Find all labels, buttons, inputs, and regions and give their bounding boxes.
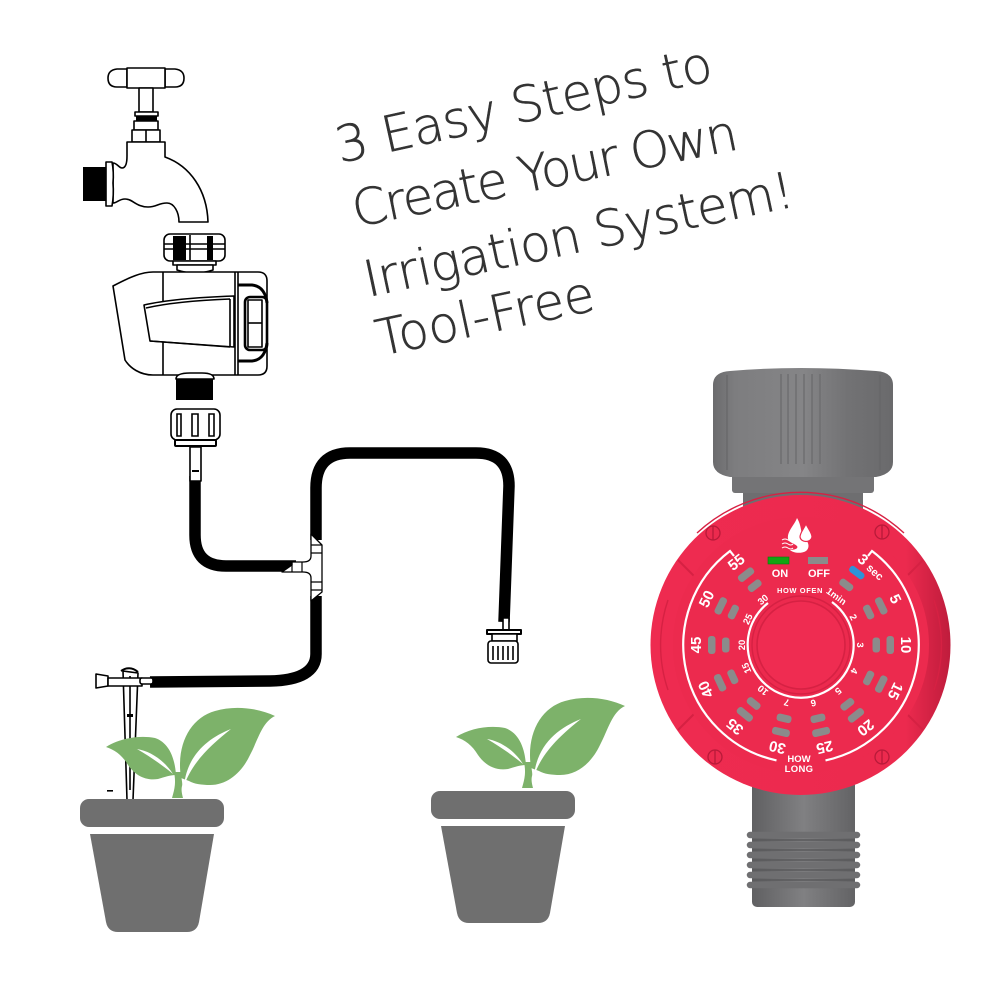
dial ticks and numbers: 20 bbox=[854, 716, 877, 739]
center knob bbox=[752, 596, 850, 694]
dial ticks and numbers: 55 bbox=[725, 551, 748, 574]
dial ticks and numbers: 15 bbox=[884, 680, 906, 702]
title: handwritten heading bbox=[330, 35, 799, 368]
icon: hose end cap bbox=[487, 618, 521, 663]
plant pot: left bbox=[80, 799, 224, 932]
dial ticks and numbers: 3 sec bbox=[854, 551, 888, 584]
product: water timer bbox=[650, 368, 950, 907]
outlet threaded stem bbox=[750, 780, 857, 907]
dial status labels: LONG bbox=[785, 764, 813, 775]
dial ticks and numbers: 7 bbox=[783, 696, 791, 708]
dial ticks and numbers: 40 bbox=[695, 678, 718, 700]
dial status labels: HOW OFEN bbox=[777, 586, 823, 595]
gray coupling nut bbox=[713, 368, 893, 515]
logo: water drops bbox=[782, 518, 812, 553]
dial status labels: OFF bbox=[808, 568, 830, 580]
screws bbox=[706, 525, 889, 764]
dial status labels: ON bbox=[772, 568, 788, 580]
title: handwritten heading: Tool-Free bbox=[370, 265, 600, 368]
icon: water faucet line drawing bbox=[83, 68, 208, 222]
dial ticks and numbers: 45 bbox=[688, 637, 705, 653]
title: handwritten heading: 3 Easy Steps to bbox=[330, 35, 717, 175]
dial ticks and numbers bbox=[688, 550, 914, 757]
plant: left seedling bbox=[106, 708, 275, 798]
LED indicators bbox=[768, 557, 866, 581]
icon: drip emitter stake bbox=[96, 668, 153, 800]
dial ticks and numbers: 5 bbox=[832, 685, 843, 697]
dial ticks and numbers: 25 bbox=[814, 737, 835, 757]
dial ticks and numbers: 15 bbox=[740, 660, 754, 675]
icon: inlet stem connector bbox=[190, 447, 201, 481]
plant pot: right bbox=[431, 791, 575, 923]
dial ticks and numbers: 10 bbox=[897, 637, 914, 653]
icon: water timer line drawing bbox=[113, 272, 267, 375]
red dial body bbox=[650, 492, 950, 795]
title: handwritten heading: Create Your Own bbox=[347, 104, 743, 239]
dial ticks and numbers: 30 bbox=[767, 737, 788, 757]
plant: right seedling bbox=[456, 698, 625, 788]
dial ticks and numbers: 30 bbox=[756, 593, 771, 608]
dial ticks and numbers: 35 bbox=[723, 714, 747, 738]
icon: T connector bbox=[282, 534, 322, 601]
dial ticks and numbers: 25 bbox=[741, 612, 756, 627]
dial ticks and numbers: 2 bbox=[847, 613, 859, 622]
icon: inlet coupling nut bbox=[164, 234, 225, 273]
dial status labels bbox=[772, 568, 830, 775]
dial status labels: HOW bbox=[787, 754, 811, 765]
dial ticks and numbers: 4 bbox=[847, 666, 860, 676]
dial ticks and numbers: 50 bbox=[696, 588, 718, 610]
dial ticks and numbers: 10 bbox=[756, 682, 771, 697]
dial ticks and numbers: 6 bbox=[809, 696, 817, 708]
dial ticks and numbers: 20 bbox=[737, 640, 748, 650]
dial ticks and numbers: 3 bbox=[854, 642, 865, 648]
white scale arcs bbox=[683, 551, 919, 760]
tubing: black drip hose network bbox=[150, 453, 509, 682]
icon: outlet thread and hose nut bbox=[171, 373, 220, 446]
dial ticks and numbers: 5 bbox=[885, 592, 904, 607]
title: handwritten heading: Irrigation System! bbox=[358, 161, 799, 309]
dial ticks and numbers: 1min bbox=[824, 586, 848, 608]
